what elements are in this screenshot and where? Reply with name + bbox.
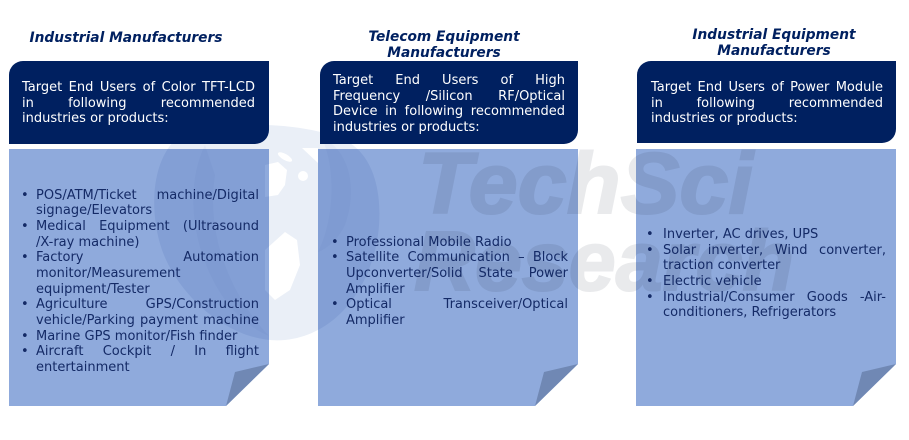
list: RF/Optical industries xyxy=(331,235,568,328)
title: Industrial Equipment Manufacturers xyxy=(692,27,856,59)
watermark wordmark: Research xyxy=(414,214,794,308)
list: TFT-LCD industries: monitor/Measurement xyxy=(36,266,180,281)
list: Power Module industries: Electric vehicle xyxy=(663,274,762,289)
header box: Color TFT-LCD: in following recommended xyxy=(22,96,255,111)
list: RF/Optical industries: • xyxy=(331,235,339,250)
list: TFT-LCD industries: POS/ATM/Ticket machine/Digital xyxy=(36,188,259,203)
list: TFT-LCD industries: • xyxy=(21,219,29,234)
list: Power Module industries: • xyxy=(646,290,654,305)
list: TFT-LCD industries: • xyxy=(21,250,29,265)
list: TFT-LCD industries: entertainment xyxy=(36,360,130,375)
list: TFT-LCD industries: • xyxy=(21,344,29,359)
header box: Power Module: Target End Users of Power Module xyxy=(651,80,883,95)
header box: RF/Optical device: industries or products: xyxy=(333,120,480,135)
list: TFT-LCD industries: vehicle/Parking payment machine xyxy=(36,313,259,328)
list: Power Module industries: • xyxy=(646,243,654,258)
list: TFT-LCD industries: Agriculture GPS/Construction xyxy=(36,297,259,312)
panel: Power Module end users xyxy=(636,61,896,406)
note shape with folded corner xyxy=(318,149,578,406)
title: Industrial Manufacturers: Industrial Manufacturers xyxy=(30,30,222,46)
list: RF/Optical industries: Optical Transceiver/Optical xyxy=(346,297,568,312)
list: TFT-LCD industries: Marine GPS monitor/Fish finder xyxy=(36,329,237,344)
list: TFT-LCD industries: • xyxy=(21,297,29,312)
panel: Color TFT-LCD end users xyxy=(9,61,269,406)
list: Power Module industries: • xyxy=(646,227,654,242)
watermark wordmark: TechSci xyxy=(418,136,755,232)
list: Power Module industries: Inverter, AC drives, UPS xyxy=(663,227,818,242)
header box: RF/Optical device: Frequency /Silicon RF/Optical xyxy=(333,89,565,104)
header box: RF/Optical device: Device in following recommended xyxy=(333,104,565,119)
list: RF/Optical industries: • xyxy=(331,250,339,265)
list: TFT-LCD industries: equipment/Tester xyxy=(36,282,150,297)
list: RF/Optical industries: Professional Mobile Radio xyxy=(346,235,512,250)
header box: Color TFT-LCD: industries or products: xyxy=(22,111,169,126)
title: Industrial Equipment Manufacturers: Industrial Equipment xyxy=(692,27,856,43)
title: Telecom Equipment Manufacturers: Manufacturers xyxy=(387,45,501,61)
list: TFT-LCD industries xyxy=(21,188,259,375)
list: Power Module industries xyxy=(646,227,886,320)
list: TFT-LCD industries: • xyxy=(21,188,29,203)
list: TFT-LCD industries: • xyxy=(21,329,29,344)
header box: RF/Optical device xyxy=(320,61,578,144)
list: RF/Optical industries: Amplifier xyxy=(346,282,405,297)
note shape with folded corner xyxy=(636,149,896,406)
header box: Color TFT-LCD xyxy=(9,61,269,144)
note shape with folded corner xyxy=(9,149,269,406)
header box: Power Module xyxy=(637,61,896,143)
list: RF/Optical industries: Upconverter/Solid State Power xyxy=(346,266,568,281)
list: Power Module industries: conditioners, Refrigerators xyxy=(663,305,836,320)
list: TFT-LCD industries: Factory Automation xyxy=(36,250,259,265)
header box: Color TFT-LCD: Target End Users of Color TFT-LCD xyxy=(22,80,255,95)
list: RF/Optical industries: Satellite Communication – Block xyxy=(346,250,568,265)
watermark logo: globe with orbits xyxy=(154,125,379,340)
header box: Power Module: industries or products: xyxy=(651,111,798,126)
list: TFT-LCD industries: Medical Equipment (Ultrasound xyxy=(36,219,259,234)
list: Power Module industries: traction converter xyxy=(663,258,780,273)
title: Telecom Equipment Manufacturers: Telecom Equipment xyxy=(368,29,520,45)
list: TFT-LCD industries: Aircraft Cockpit / In flight xyxy=(36,344,259,359)
header box: Power Module: in following recommended xyxy=(651,96,883,111)
panel: High Frequency / Silicon RF / Optical device end users xyxy=(318,61,578,406)
list: TFT-LCD industries: signage/Elevators xyxy=(36,203,152,218)
list: Power Module industries: Solar inverter, Wind converter, xyxy=(663,243,886,258)
watermark wordmark xyxy=(414,136,794,308)
header box: RF/Optical device: Target End Users of High xyxy=(333,73,565,88)
title: Telecom Equipment Manufacturers xyxy=(368,29,520,61)
list: Power Module industries: Industrial/Consumer Goods -Air- xyxy=(663,290,886,305)
list: RF/Optical industries: Amplifier xyxy=(346,313,405,328)
list: Power Module industries: • xyxy=(646,274,654,289)
title: Industrial Equipment Manufacturers: Manufacturers xyxy=(717,43,831,59)
list: TFT-LCD industries: /X-ray machine) xyxy=(36,235,139,250)
list: RF/Optical industries: • xyxy=(331,297,339,312)
